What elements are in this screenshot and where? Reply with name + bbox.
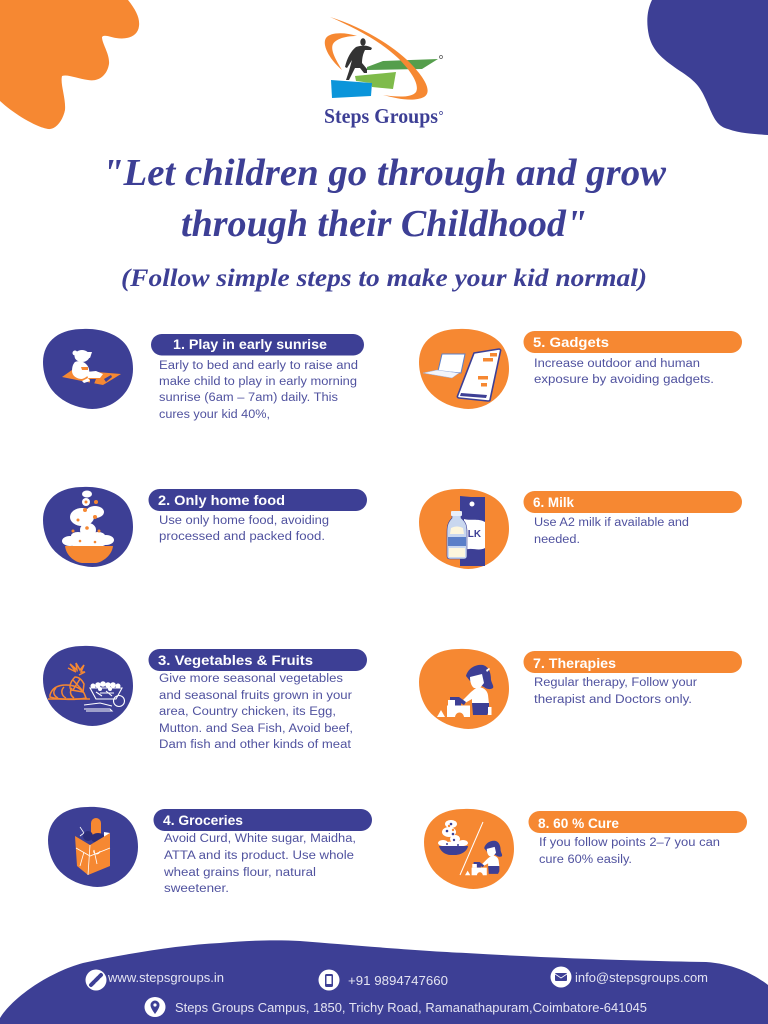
icon: food bowl: [43, 487, 133, 567]
heading pill: [524, 331, 742, 353]
email contact: [550, 966, 708, 988]
icon: location pin: [144, 997, 166, 1017]
logo: climbing figure: [345, 38, 372, 80]
heading text: 2. Only home food: [158, 493, 285, 508]
panel: 4 groceries: [48, 807, 372, 895]
body text: processed and packed food.: [159, 531, 325, 543]
heading text: 7. Therapies: [533, 656, 616, 671]
body text: sweetener.: [164, 883, 229, 895]
heading pill: [148, 489, 367, 511]
body text: area, Country chicken, its Egg,: [159, 706, 336, 718]
phone text: +91 9894747660: [348, 974, 448, 988]
icon: laptop and phone: [419, 329, 509, 409]
body text: needed.: [534, 534, 580, 546]
body text: Mutton. and Sea Fish, Avoid beef,: [159, 723, 353, 735]
body text: Use only home food, avoiding: [159, 515, 329, 527]
logo: light green step: [355, 72, 396, 89]
body text: and seasonal fruits grown in your: [159, 690, 352, 702]
heading pill: [528, 811, 747, 833]
panel: 3 vegetables and fruits: [43, 646, 367, 751]
icon: child with blocks: [419, 649, 509, 729]
address contact: [144, 997, 647, 1017]
body text: exposure by avoiding gadgets.: [534, 374, 714, 386]
body text: [534, 358, 714, 386]
body text: Dam fish and other kinds of meat: [159, 739, 352, 751]
website text: www.stepsgroups.in: [107, 971, 224, 985]
icon: envelope: [550, 966, 572, 988]
panel: 1 play in early sunrise: [43, 329, 364, 421]
address text: Steps Groups Campus, 1850, Trichy Road, Ramanathapuram,Coimbatore-641045: [175, 1001, 647, 1015]
icon: grocery bag: [48, 807, 138, 887]
body text: If you follow points 2–7 you can: [539, 837, 720, 849]
icon: milk carton and bottle: [419, 489, 509, 569]
heading text: 6. Milk: [533, 495, 574, 510]
logo: blue step: [331, 80, 372, 98]
subtitle: (Follow simple steps to make your kid normal): [121, 265, 647, 292]
footer: [0, 940, 768, 1024]
body text: Use A2 milk if available and: [534, 517, 689, 529]
heading text: 1. Play in early sunrise: [173, 337, 328, 352]
heading text: 3. Vegetables & Fruits: [158, 653, 313, 668]
footer background wave: [0, 940, 768, 1024]
heading text: 5. Gadgets: [533, 335, 609, 350]
body text: [159, 673, 353, 751]
icon: milk carton and bottle: ILK: [465, 529, 482, 540]
body text: sunrise (6am – 7am) daily. This: [159, 392, 338, 404]
heading pill: [151, 334, 364, 356]
body text: [539, 837, 720, 866]
icon: bowl and child: [424, 809, 514, 889]
body text: [534, 517, 689, 546]
body text: Regular therapy, Follow your: [534, 677, 697, 689]
decorative navy blob, top right: [647, 0, 768, 135]
phone contact: [318, 970, 448, 990]
icon: link: [86, 970, 106, 990]
title: through their Childhood": [181, 203, 587, 245]
logo: orange swoosh: [330, 17, 428, 100]
title: [102, 152, 667, 245]
body text: Early to bed and early to raise and: [159, 360, 358, 372]
body text: wheat grains flour, natural: [163, 867, 316, 879]
logo: orange arc: [325, 33, 357, 70]
body text: [163, 833, 356, 895]
website contact: [86, 970, 224, 990]
heading pill: [154, 809, 372, 831]
body text: cures your kid 40%,: [159, 409, 270, 421]
body text: ATTA and its product. Use whole: [164, 850, 354, 862]
body text: [159, 515, 329, 543]
email text: info@stepsgroups.com: [575, 971, 708, 985]
wordmark registered mark: [440, 112, 442, 114]
heading text: 8. 60 % Cure: [538, 816, 619, 831]
body text: [534, 677, 697, 706]
icon: fruits and vegetables: [43, 646, 133, 726]
logo registered mark: [440, 56, 442, 58]
panel: 5 gadgets: [419, 329, 742, 409]
logo: Steps Groups: [324, 17, 442, 128]
body text: [159, 360, 358, 421]
heading pill: [524, 491, 742, 513]
title: "Let children go through and grow: [102, 152, 667, 194]
logo: dark green step: [367, 59, 438, 70]
heading pill: [148, 649, 367, 671]
body text: make child to play in early morning: [159, 376, 357, 388]
body text: Increase outdoor and human: [534, 358, 700, 370]
logo wordmark: Steps Groups: [324, 104, 438, 128]
panel: 7 therapies: [419, 649, 742, 729]
decorative orange blob, top left: [0, 0, 139, 129]
panel: 8 60% cure: [424, 809, 747, 889]
heading text: 4. Groceries: [163, 813, 243, 828]
body text: therapist and Doctors only.: [534, 694, 692, 706]
body text: cure 60% easily.: [539, 854, 632, 866]
panel: 6 milk: [419, 489, 742, 569]
panel: 2 only home food: [43, 487, 367, 567]
icon: child on mat: [43, 329, 133, 409]
body text: Avoid Curd, White sugar, Maidha,: [164, 833, 356, 845]
icon: phone: [318, 970, 340, 990]
body text: Give more seasonal vegetables: [159, 673, 343, 685]
heading pill: [524, 651, 742, 673]
